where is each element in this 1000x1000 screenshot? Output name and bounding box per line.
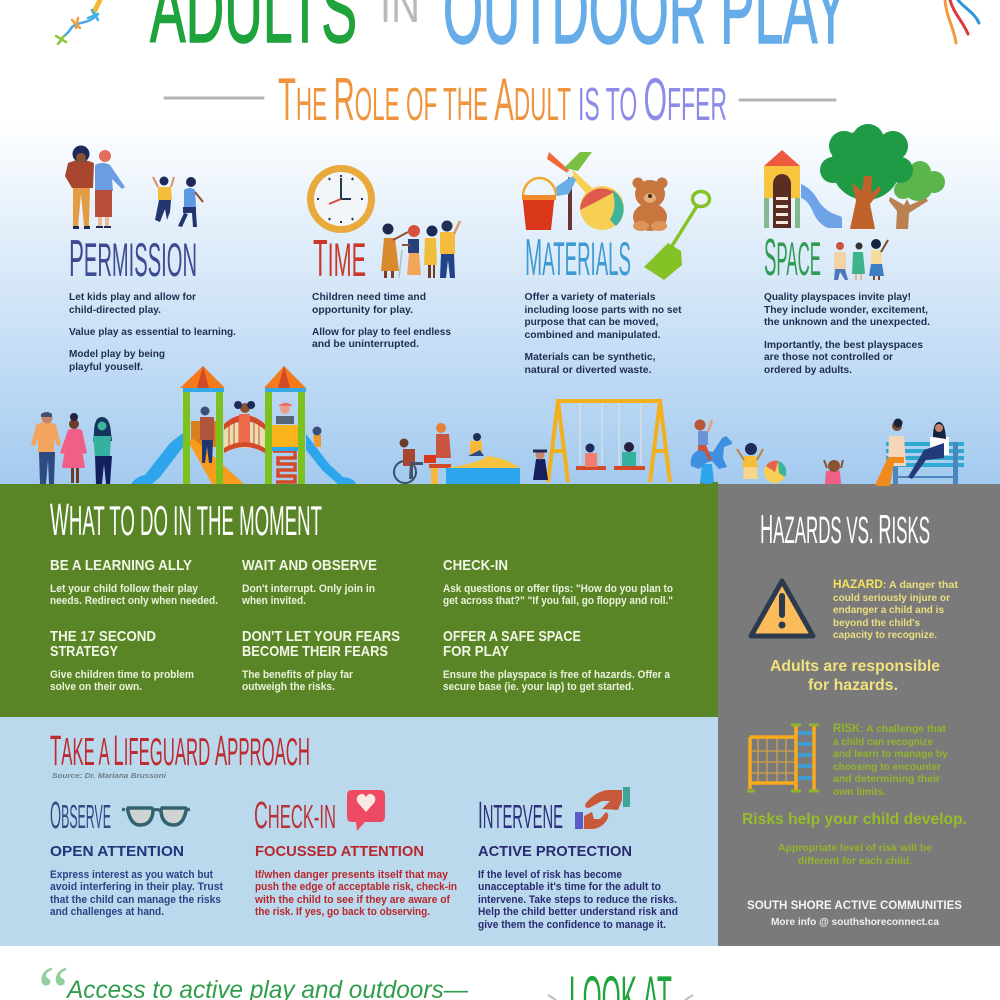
column: observe: Express interest as you watch but [50,869,213,881]
icon: heart speech bubble [347,790,385,831]
scene: swing set [533,401,670,482]
tip: wait and observe: WAIT AND OBSERVE [242,557,377,574]
quote [38,953,469,1000]
panel: space: SPACE [764,229,821,287]
text: risk definition: a child can recognize [833,736,933,748]
text: materials body [524,291,682,376]
text: permission body: Value play as essential to learning. [69,326,236,338]
panel: materials [522,152,710,376]
icon: four children [381,220,460,278]
text: space body: ordered by adults. [764,364,852,376]
text: appropriate level: Appropriate level of risk will be [778,842,932,854]
column: check-in [254,790,457,918]
icon: adults and children [65,146,203,229]
subtitle: IS TO OFFER [578,66,727,133]
column: intervene: Help the child better understand risk and [478,906,678,918]
heading: lifeguard: TAKE A LIFEGUARD APPROACH [50,727,310,775]
scene: bench with two women [875,418,964,486]
column: observe [50,795,223,918]
text: time body: and be uninterrupted. [312,338,419,350]
callout: risks help: Risks help your child develop. [742,811,967,828]
panel: materials: MATERIALS [525,229,631,287]
column: check-in: the risk. If yes, go back to observing. [255,906,430,918]
title [150,0,848,64]
column: check-in: CHECK-IN [254,795,336,837]
tip: wait and observe: when invited. [241,595,306,607]
column: observe: OPEN ATTENTION [50,843,184,860]
column: observe: that the child can manage the risks [50,894,221,906]
panel: space [764,124,945,376]
text: materials body: purpose that can be moved, [524,316,659,328]
tip: the 17 second strategy: THE 17 SECOND [50,628,156,645]
column: intervene: give them the confidence to manage it. [478,919,666,931]
tip: wait and observe: Don't interrupt. Only join in [242,583,375,595]
text: hazard definition: beyond the child's [833,617,920,629]
text: risk definition: and learn to manage by [833,748,948,760]
panel: what to do in the moment [0,484,718,717]
text: risk definition [833,723,948,798]
tip: check-in: Ask questions or offer tips: "How do you plan to [443,583,673,595]
column: intervene: ACTIVE PROTECTION [478,843,632,860]
scene: play structure [131,366,356,484]
text: space body: Quality playspaces invite play! [764,291,911,303]
text: hazard definition [833,579,959,641]
credit: More info @ southshoreconnect.ca [771,916,939,928]
icon: ribbons right [945,0,979,43]
tip: fears: BECOME THEIR FEARS [242,643,388,660]
tip: safe space: FOR PLAY [443,643,509,660]
column: intervene: If the level of risk has become [478,869,622,881]
column: observe: and challenges at hand. [50,906,164,918]
tip: check-in: CHECK-IN [443,557,508,574]
panel: hazards vs risks [718,484,1000,946]
column: intervene [478,787,678,931]
sky background [0,124,1000,486]
text: risk definition: choosing to encounter [833,761,941,773]
callout: adults responsible [770,658,940,694]
text: time body: opportunity for play. [312,304,413,316]
text: risk definition: RISK: A challenge that [833,723,946,735]
credit [747,900,962,928]
tip: be a learning ally: BE A LEARNING ALLY [50,557,192,574]
text: materials body: Offer a variety of materials [524,291,656,303]
text: materials body: Materials can be synthetic, [524,351,656,363]
scene: ground strip and spring rider [691,420,843,484]
text: appropriate level [778,842,932,867]
text: space body: They include wonder, excitement, [764,304,928,316]
text: permission body: Let kids play and allow for [69,291,196,303]
text: hazard definition: could seriously injure or [833,592,950,604]
icon: climbing net [747,725,819,792]
text: hazard definition: endanger a child and is [833,604,944,616]
callout: adults responsible: for hazards. [808,677,898,694]
text: space body: are those not controlled or [764,351,893,363]
panel: lifeguard approach [0,717,718,946]
look at heading [548,964,693,1000]
column: check-in: with the child to see if they are aware of [254,894,450,906]
credit: SOUTH SHORE ACTIVE COMMUNITIES [747,900,962,912]
tip: the 17 second strategy [50,628,194,693]
text: appropriate level: different for each child. [798,855,912,867]
icon: three children holding hands [834,239,888,280]
column: observe: OBSERVE [50,795,111,837]
tip: fears [242,628,400,693]
icon: toys [522,152,710,280]
icon: kite left [56,0,100,44]
panel: permission: PERMISSION [69,230,197,288]
column: check-in: push the edge of acceptable risk, check-in [255,881,457,893]
text: hazard definition: HAZARD: A danger that [833,579,959,591]
column: observe: avoid interfering in their play. Trust [50,881,223,893]
heading: time: TIME [313,230,366,288]
tip: fears: The benefits of play far [242,669,354,681]
icon: warning triangle [751,581,813,636]
text: materials body: combined and manipulated. [524,329,661,341]
tip: safe space [443,628,671,693]
icon: clock [307,165,375,233]
tip: the 17 second strategy: Give children time to problem [50,669,194,681]
text: hazard definition: capacity to recognize. [833,629,937,641]
icon: hands [575,787,630,829]
text: permission body: Model play by being [69,348,165,360]
text: time body: Allow for play to feel endless [312,326,451,338]
tip: check-in: get across that?" "If you fall, go floppy and roll." [443,595,673,607]
column: check-in: FOCUSSED ATTENTION [255,843,424,860]
scene: sand table [394,423,520,484]
text: space body [764,291,930,376]
text: risk definition: own limits. [833,786,886,798]
subtitle: THE ROLE OF THE ADULT [278,66,571,133]
tip: fears: DON'T LET YOUR FEARS [242,628,400,645]
tip: safe space: secure base (ie. your lap) to get started. [443,681,634,693]
column: intervene: unacceptable it's time for the adult to [478,881,661,893]
text: permission body: child-directed play. [69,304,161,316]
source note: Source: Dr. Mariana Brussoni [52,771,167,780]
tip: be a learning ally [50,557,218,607]
subtitle [165,66,835,133]
text: permission body: playful youself. [69,361,143,373]
text: space body: Importantly, the best playspaces [764,339,923,351]
tip: check-in [443,557,673,607]
tip: be a learning ally: Let your child follow their play [50,583,199,595]
tip: wait and observe [241,557,377,607]
panel: time [307,165,460,350]
icon: glasses [123,808,189,825]
text: time body: Children need time and [312,291,426,303]
text: space body: the unknown and the unexpected. [764,316,930,328]
tip: be a learning ally: needs. Redirect only when needed. [50,595,218,607]
icon: play tower and trees [764,124,945,229]
text: materials body: including loose parts with no set [524,304,682,316]
text: materials body: natural or diverted waste. [524,364,652,376]
tip: safe space: Ensure the playspace is free of hazards. Offer a [443,669,671,681]
panel: permission [65,146,236,373]
panel: what to do in the moment: WHAT TO DO IN THE MOMENT [50,494,322,545]
tip: the 17 second strategy: solve on their own. [50,681,142,693]
tip: the 17 second strategy: STRATEGY [50,643,118,660]
heading: hazards vs risks: HAZARDS VS. RISKS [760,506,930,552]
column: intervene: INTERVENE [478,795,563,837]
column: intervene: intervene. Take steps to reduce the risks. [478,894,677,906]
callout: adults responsible: Adults are responsible [770,658,940,675]
column: check-in: If/when danger presents itself that may [255,869,449,881]
tip: safe space: OFFER A SAFE SPACE [443,628,581,645]
scene: adults standing [31,412,112,484]
text: permission body [69,291,236,373]
tip: fears: outweigh the risks. [242,681,335,693]
text: time body [312,291,451,350]
text: risk definition: and determining their [833,773,940,785]
